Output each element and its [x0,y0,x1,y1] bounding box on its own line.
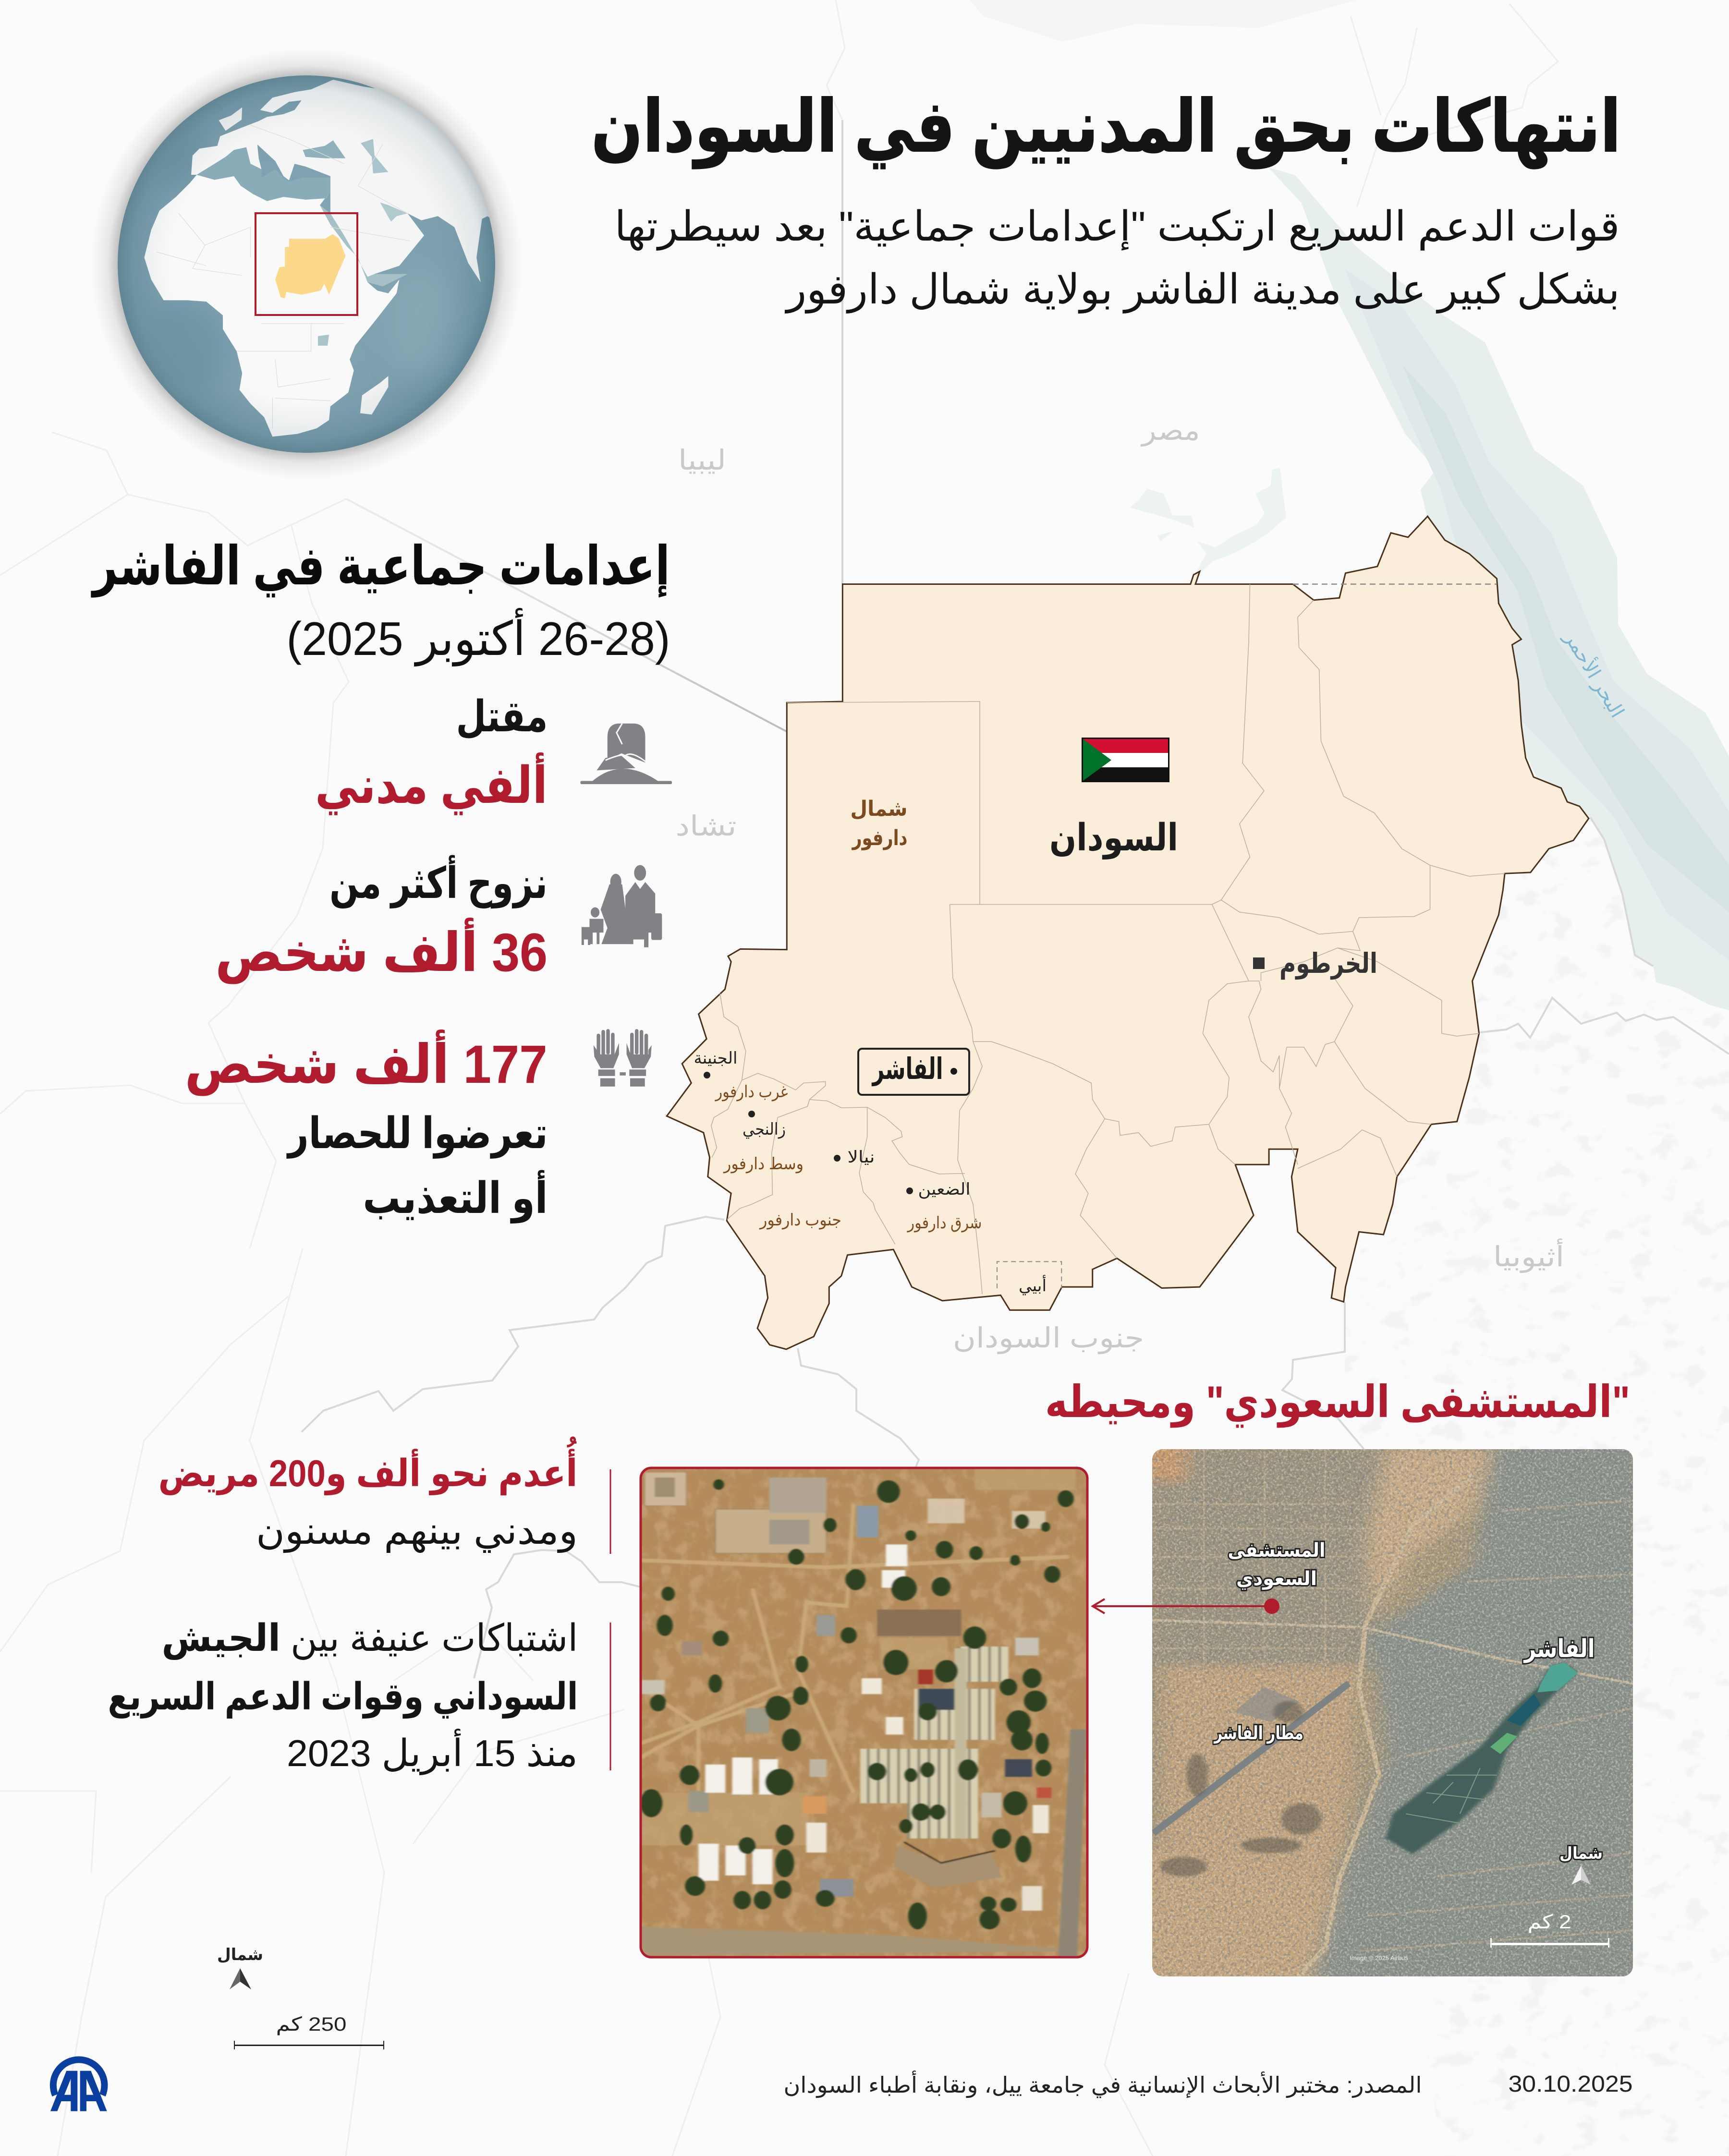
text block: clashes: السوداني وقوات الدعم السريع [108,1675,578,1719]
text block: clashes [108,1617,578,1776]
north arrow: satellite [1559,1844,1603,1885]
divider: patients [610,1469,611,1554]
north arrow: satellite: شمال [1559,1844,1603,1863]
divider: clashes [610,1623,611,1770]
flag of Sudan [1082,738,1169,782]
bottom road [641,1926,1089,1955]
Eurasia and Arabia [191,80,499,282]
panel: mass executions stats [91,536,672,1224]
Eritrea-Ethiopia border [1480,998,1729,1054]
Lake Victoria [318,335,329,346]
text block: patients executed [158,1437,578,1553]
subtitle [615,204,1619,314]
Sudan outline [667,516,1589,1349]
light speckle [1152,1449,1633,1976]
right road [1059,1729,1086,1957]
scale bar: satellite: 2 كم [1527,1912,1571,1933]
stat: 177 thousand value: 177 ألف شخص [184,1030,548,1096]
ocean tone patches [132,111,454,401]
burn scars [1160,1701,1322,1877]
hospital ward blocks [860,1647,1032,1839]
wadi field lines [1406,1768,1497,1824]
Black Sea [303,140,345,158]
label: Red Sea: البحر الأحمر [1559,626,1630,722]
label: West Darfur: غرب دارفور [715,1083,788,1102]
label: Libya: ليبيا [678,445,726,476]
marker and arrow to close-up [1093,1599,1279,1614]
Libya-Egypt border [841,120,843,584]
label: Chad: تشاد [675,811,737,842]
label: Sudan: السودان [1049,816,1178,860]
Red Sea and Gulf of Aden [320,205,408,287]
label: Egypt: مصر [1140,415,1200,447]
label: El Fasher: الفاشر [1523,1635,1595,1663]
white tents [698,1757,778,1884]
panel heading: إعدامات جماعية في الفاشر [91,536,670,598]
logo: Anadolu Agency [50,2059,107,2111]
label: East Darfur: شرق دارفور [907,1214,982,1233]
compounds [641,1472,1052,1911]
stat: displaced value: 36 ألف شخص [215,918,548,984]
airport apron [1234,1687,1298,1722]
Chad-South border near text [474,1550,641,1678]
Sudan map [667,516,1589,1349]
scale bar: main map: 250 كم [276,2014,347,2035]
city: Zalingei: زالنجي [743,1120,786,1139]
scale bar: main map [234,2014,384,2049]
footer: source: المصدر: مختبر الأبحاث الإنسانية في جامعة ييل، ونقابة أطباء السودان [784,2071,1422,2098]
Central African Republic border [302,1217,724,1432]
Khartoum marker [1253,957,1265,969]
globe shadow [90,48,523,480]
satellite image: hospital close-up [640,1468,1089,1957]
South Sudan western border [798,1348,919,1468]
hospital image frame [641,1468,1087,1957]
urban speckle [1152,1449,1633,1976]
South Sudan-Ethiopia border [1282,1302,1364,1449]
urban texture [1152,1449,1633,1951]
label: Saudi Hospital [1228,1540,1326,1590]
label: North Darfur [850,797,908,850]
city: Nyala [834,1148,875,1166]
label: Khartoum: الخرطوم [1279,948,1377,980]
subtitle: بشكل كبير على مدينة الفاشر بولاية شمال دارفور [784,266,1619,314]
icon: broken grave [580,724,672,784]
Halayeb dashed line [1293,583,1497,585]
label: North Darfur: دارفور [852,826,908,850]
label: North Darfur: شمال [850,797,908,821]
Abyei dashed box [997,1261,1061,1288]
icon: displaced family [582,865,662,947]
date line: (26-28 أكتوبر 2025) [286,608,670,666]
El Fasher callout: الفاشر [871,1053,943,1086]
damaged structure [894,1845,1002,1888]
label: South Darfur: جنوب دارفور [759,1211,841,1230]
satellite image: El Fasher overview [1093,1441,1649,1983]
city: Ed Daein: الضعين [918,1180,970,1199]
locator red box [256,213,357,315]
text block: patients executed: ومدني بينهم مسنون [256,1510,578,1553]
trees [640,1479,1074,1929]
Africa [144,175,399,436]
state boundaries [787,584,1505,1294]
Red Sea [1268,167,1729,1010]
globe locator [90,48,523,480]
Britain [219,107,242,131]
stat: siege and torture text [286,1110,548,1224]
relief texture: Ethiopia highlands [1345,817,1729,2156]
stat: killed label: مقتل [456,693,548,741]
city: Nyala: نيالا [847,1148,875,1166]
subtitle: قوات الدعم السريع ارتكبت "إعدامات جماعية" بعد سيطرتها [615,204,1619,251]
label: Abyei: أبيي [1019,1275,1047,1296]
north arrow: main map [217,1946,263,1989]
label: South Sudan: جنوب السودان [953,1322,1144,1355]
Darfur state boundaries [711,993,1061,1288]
Mediterranean [197,147,330,201]
city: El Geneina: الجنينة [694,1049,738,1067]
heading: Saudi Hospital and surroundings: "المستشفى السعودي" ومحيطه [1045,1378,1630,1428]
label: Saudi Hospital: المستشفى [1228,1540,1326,1561]
Lake Nasser [1130,468,1286,575]
label: El Fasher airport: مطار الفاشر [1213,1723,1303,1744]
country lines [157,125,410,428]
text block: clashes: منذ 15 أبريل 2023 [287,1729,578,1776]
Ethiopia-Eritrea coast [1590,817,1653,966]
stat: displaced label: نزوح أكثر من [329,855,548,909]
Caspian [361,139,388,173]
Sudan highlighted [275,234,345,298]
text block: patients executed: أُعدم نحو ألف و200 مريض [158,1437,577,1495]
Madagascar [360,376,388,414]
stat: siege and torture text: أو التعذيب [363,1170,548,1224]
city: Zalingei [743,1111,786,1139]
label: Central Darfur: وسط دارفور [723,1155,804,1174]
scale bar: satellite [1490,1912,1609,1948]
Mediterranean sea [970,0,1356,42]
image credit: Image © 2025 Airbus [1350,1954,1408,1962]
airport runway [1153,1684,1349,1833]
text block: clashes: اشتباكات عنيفة بين الجيش [161,1617,578,1660]
wadi vegetation [1386,1662,1578,1854]
north arrow: main map: شمال [217,1946,263,1964]
icon: cuffed hands [594,1029,652,1087]
stat: siege and torture text: تعرضوا للحصار [286,1110,548,1159]
stat: killed value: ألفي مدني [315,752,548,815]
footer: date: 30.10.2025 [1508,2071,1633,2097]
El Fasher callout [858,1049,969,1095]
globe sphere [118,75,499,453]
Persian Gulf [380,202,408,222]
wadi and main road [1298,1476,1473,1976]
label: Ethiopia: أثيوبيا [1493,1238,1564,1273]
city: El Geneina [694,1049,738,1078]
label: Saudi Hospital: السعودي [1236,1568,1317,1590]
Libya-Chad border [346,499,786,731]
